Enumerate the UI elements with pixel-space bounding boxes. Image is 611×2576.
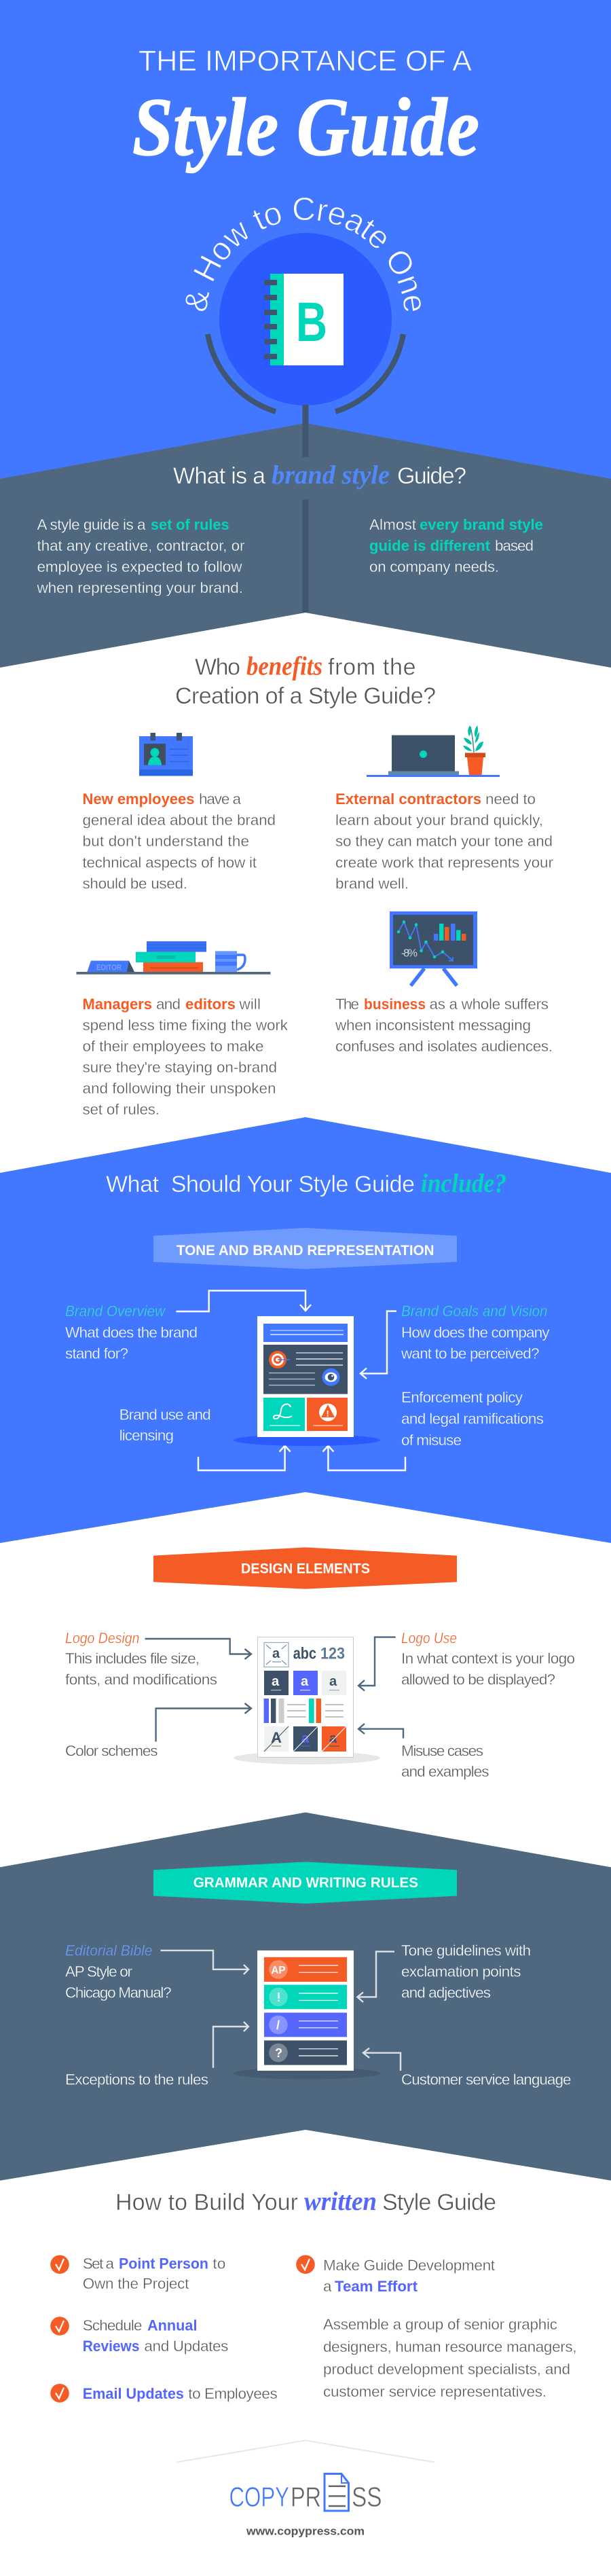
heading: include? bbox=[421, 1169, 506, 1198]
heading: Who bbox=[195, 655, 240, 681]
text: managers and editors: Managers bbox=[83, 996, 152, 1013]
text: managers and editors: spend less time fixing the work bbox=[83, 1017, 289, 1034]
heading: What Should Your Style Guide bbox=[106, 1172, 415, 1197]
icon: editor desk bbox=[76, 941, 270, 975]
text: logo design bbox=[65, 1630, 217, 1688]
text: tone guidelines: and adjectives bbox=[401, 1984, 491, 2001]
text: the business: business bbox=[364, 996, 426, 1013]
text: enforcement policy bbox=[401, 1389, 544, 1449]
icon: microphone notebook bbox=[208, 233, 403, 412]
text: editorial bible bbox=[65, 1942, 172, 2001]
text: external contractors: learn about your brand quickly, bbox=[335, 812, 543, 829]
heading bbox=[115, 2187, 496, 2216]
text: point person: to bbox=[212, 2255, 225, 2272]
text: the business: as a whole suffers bbox=[429, 996, 549, 1013]
icon: editor desk: EDITOR bbox=[96, 964, 122, 972]
panel: how to build bbox=[50, 2187, 577, 2403]
document illustration: writing: ? bbox=[275, 2046, 282, 2060]
text: the business: when inconsistent messaging bbox=[335, 1017, 531, 1034]
panel: who benefits bbox=[76, 652, 554, 1118]
text: annual reviews: Schedule bbox=[83, 2317, 143, 2334]
icon: id badge bbox=[139, 733, 193, 776]
text: the business bbox=[335, 996, 553, 1055]
text: every guide differs: guide is different bbox=[369, 537, 490, 554]
document illustration: logo: 123 bbox=[320, 1644, 345, 1663]
text: brand overview: What does the brand bbox=[65, 1324, 198, 1341]
heading: Guide? bbox=[397, 463, 466, 489]
text: external contractors bbox=[335, 791, 554, 892]
text: assemble a group: customer service representatives. bbox=[323, 2383, 547, 2400]
text: assemble a group bbox=[323, 2316, 577, 2400]
text: tone guidelines bbox=[401, 1942, 531, 2001]
footer logo: COPY bbox=[229, 2482, 289, 2513]
text: team effort: a bbox=[323, 2278, 332, 2295]
text: new employees: should be used. bbox=[83, 875, 187, 892]
text: definition: set of rules bbox=[151, 516, 229, 533]
text: new employees: have a bbox=[199, 791, 241, 808]
heading: Creation of a Style Guide? bbox=[175, 683, 436, 709]
text: team effort: Team Effort bbox=[335, 2278, 418, 2295]
text: customer service: Customer service language bbox=[401, 2071, 572, 2088]
text: email updates bbox=[83, 2385, 278, 2402]
heading: How to Build Your bbox=[115, 2190, 298, 2215]
panel: design elements bbox=[65, 1547, 575, 1780]
footer logo: www.copypress.com bbox=[246, 2525, 365, 2537]
heading: brand style bbox=[272, 460, 390, 490]
text: email updates: Email Updates bbox=[83, 2385, 184, 2402]
text: annual reviews: and Updates bbox=[144, 2338, 228, 2355]
text: brand goals: want to be perceived? bbox=[401, 1345, 539, 1362]
document illustration: logo: a bbox=[272, 1646, 280, 1661]
icon: check marks bbox=[50, 2255, 315, 2403]
text: definition bbox=[37, 516, 245, 596]
banner: DESIGN ELEMENTS bbox=[241, 1561, 370, 1577]
icon: presentation chart: -8% bbox=[401, 948, 418, 960]
text: email updates: to Employees bbox=[188, 2385, 278, 2402]
document illustration: brand: ! bbox=[326, 1409, 329, 1419]
text: annual reviews bbox=[83, 2317, 228, 2355]
script title: Style Guide bbox=[132, 81, 479, 173]
document illustration: logo bbox=[234, 1637, 380, 1764]
footer logo bbox=[177, 2440, 434, 2537]
document illustration: writing bbox=[234, 1951, 380, 2080]
document illustration: logo: a bbox=[329, 1731, 337, 1746]
text: managers and editors: and following their unspoken bbox=[83, 1080, 276, 1097]
text: every guide differs: based bbox=[495, 537, 534, 554]
banner: TONE AND BRAND REPRESENTATION bbox=[177, 1243, 434, 1258]
document illustration: logo: a bbox=[301, 1731, 310, 1746]
text: external contractors: need to bbox=[485, 791, 536, 808]
document illustration: logo: a bbox=[329, 1674, 337, 1689]
text: every guide differs: on company needs. bbox=[369, 558, 499, 575]
banner bbox=[153, 1547, 457, 1589]
text: annual reviews: Reviews bbox=[83, 2338, 140, 2355]
text: team effort: Make Guide Development bbox=[323, 2257, 496, 2274]
text: editorial bible: Editorial Bible bbox=[65, 1942, 152, 1959]
footer logo: SS bbox=[352, 2482, 382, 2513]
heading bbox=[175, 652, 436, 709]
text: every guide differs bbox=[369, 516, 543, 575]
text: brand use bbox=[119, 1407, 211, 1444]
text: exceptions: Exceptions to the rules bbox=[65, 2071, 208, 2088]
heading: Style Guide bbox=[382, 2190, 496, 2215]
text: the business: confuses and isolates audiences. bbox=[335, 1038, 553, 1055]
text: tone guidelines: exclamation points bbox=[401, 1963, 521, 1980]
text: new employees bbox=[83, 791, 276, 892]
text: managers and editors: editors bbox=[185, 996, 236, 1013]
text: brand goals bbox=[401, 1303, 550, 1362]
document illustration: writing: ! bbox=[277, 1991, 281, 2004]
text: annual reviews: Annual bbox=[147, 2317, 197, 2334]
text: new employees: technical aspects of how it bbox=[83, 854, 257, 871]
panel: grammar and writing rules bbox=[0, 1813, 611, 2181]
arrows bbox=[145, 1637, 403, 1741]
text: tone guidelines: Tone guidelines with bbox=[401, 1942, 531, 1959]
text: every guide differs: every brand style bbox=[420, 516, 543, 533]
text: managers and editors bbox=[83, 996, 289, 1118]
text: team effort bbox=[323, 2257, 496, 2295]
text: brand overview: Brand Overview bbox=[65, 1303, 166, 1320]
heading: written bbox=[304, 2187, 377, 2216]
heading: benefits bbox=[246, 652, 322, 681]
text: enforcement policy: Enforcement policy bbox=[401, 1389, 523, 1406]
text: logo design: fonts, and modifications bbox=[65, 1671, 217, 1688]
text: definition: employee is expected to follow bbox=[37, 558, 242, 575]
text: point person bbox=[83, 2255, 225, 2292]
text: definition: when representing your brand. bbox=[37, 579, 243, 596]
text: the business: The bbox=[335, 996, 359, 1013]
text: brand overview bbox=[65, 1303, 198, 1362]
document illustration: brand bbox=[234, 1316, 380, 1446]
text: assemble a group: product development specialists, and bbox=[323, 2361, 570, 2378]
text: point person: Point Person bbox=[119, 2255, 208, 2272]
heading: What is a bbox=[173, 463, 265, 489]
arrows bbox=[177, 1290, 405, 1470]
text: brand use: licensing bbox=[119, 1427, 174, 1444]
text: new employees: general idea about the brand bbox=[83, 812, 276, 829]
text: logo design: This includes file size, bbox=[65, 1650, 200, 1667]
text: external contractors: so they can match your tone and bbox=[335, 833, 553, 850]
text: brand overview: stand for? bbox=[65, 1345, 128, 1362]
text: logo use: In what context is your logo bbox=[401, 1650, 575, 1667]
text: editorial bible: Chicago Manual? bbox=[65, 1984, 172, 2001]
text: logo use: Logo Use bbox=[401, 1630, 457, 1647]
heading bbox=[173, 460, 466, 490]
text: every guide differs: Almost bbox=[369, 516, 417, 533]
text: logo use: allowed to be displayed? bbox=[401, 1671, 555, 1688]
text: definition: that any creative, contractor, or bbox=[37, 537, 245, 554]
banner bbox=[153, 1862, 457, 1904]
text: definition: A style guide is a bbox=[37, 516, 146, 533]
panel: tone and brand representation bbox=[0, 1117, 611, 1543]
text: managers and editors: will bbox=[239, 996, 261, 1013]
document illustration: writing: AP bbox=[272, 1965, 286, 1976]
text: managers and editors: sure they're staying on-brand bbox=[83, 1059, 277, 1076]
text: external contractors: brand well. bbox=[335, 875, 409, 892]
text: logo design: Logo Design bbox=[65, 1630, 140, 1647]
text: external contractors: External contractors bbox=[335, 791, 481, 808]
text: external contractors: create work that represents your bbox=[335, 854, 554, 871]
text: enforcement policy: of misuse bbox=[401, 1432, 462, 1449]
text: assemble a group: designers, human resource managers, bbox=[323, 2338, 577, 2355]
text: assemble a group: Assemble a group of senior graphic bbox=[323, 2316, 557, 2333]
text: brand use: Brand use and bbox=[119, 1407, 211, 1423]
text: managers and editors: set of rules. bbox=[83, 1101, 160, 1118]
document illustration: logo: a bbox=[301, 1674, 309, 1689]
text: editorial bible: AP Style or bbox=[65, 1963, 133, 1980]
document illustration: logo: a bbox=[272, 1674, 280, 1689]
heading: from the bbox=[328, 655, 415, 681]
footer logo: PR bbox=[291, 2482, 321, 2513]
text: managers and editors: and bbox=[156, 996, 181, 1013]
icon: laptop and plant bbox=[367, 725, 500, 777]
text: point person: Set a bbox=[83, 2255, 114, 2272]
panel: header bbox=[0, 0, 611, 479]
text: enforcement policy: and legal ramifications bbox=[401, 1411, 544, 1428]
text: misuse cases: Misuse cases bbox=[401, 1742, 483, 1759]
icon: microphone notebook: B bbox=[296, 291, 327, 353]
icon: presentation chart bbox=[390, 911, 477, 985]
panel: what is a brand style guide bbox=[0, 405, 611, 668]
document illustration: writing: / bbox=[276, 2018, 280, 2032]
text: brand goals: How does the company bbox=[401, 1324, 550, 1341]
text: managers and editors: of their employees to make bbox=[83, 1038, 263, 1055]
curved subtitle: & How to Create One bbox=[186, 198, 421, 311]
document illustration: logo: abc bbox=[293, 1644, 316, 1663]
banner: GRAMMAR AND WRITING RULES bbox=[193, 1875, 418, 1891]
title line: THE IMPORTANCE OF A bbox=[138, 45, 472, 77]
banner bbox=[153, 1228, 457, 1269]
text: new employees: New employees bbox=[83, 791, 194, 808]
text: point person: Own the Project bbox=[83, 2275, 189, 2292]
text: misuse cases: and examples bbox=[401, 1763, 489, 1780]
text: brand goals: Brand Goals and Vision bbox=[401, 1303, 547, 1320]
text: new employees: but don't understand the bbox=[83, 833, 249, 850]
text: logo use bbox=[401, 1630, 575, 1688]
arrows bbox=[160, 1951, 401, 2071]
document illustration: logo: A bbox=[271, 1729, 282, 1746]
text: color schemes: Color schemes bbox=[65, 1742, 158, 1759]
text: misuse cases bbox=[401, 1742, 489, 1780]
heading bbox=[106, 1169, 506, 1198]
